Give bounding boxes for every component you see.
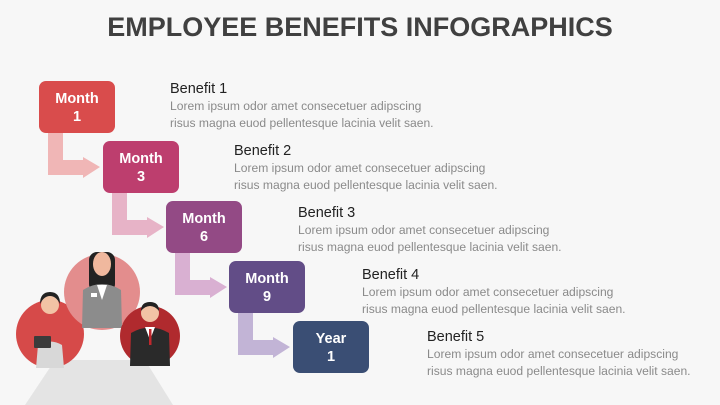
- text: benefit 5: risus magna euod pellentesque lacinia velit saen.: [427, 364, 691, 378]
- spotlight trapezoid: [25, 360, 173, 405]
- arrow 2: [112, 193, 164, 238]
- box: month 3: Month: [119, 151, 163, 167]
- box: month 1: [39, 81, 115, 133]
- box: month 9: Month: [245, 271, 289, 287]
- box: year 1: Year: [316, 331, 347, 347]
- title: EMPLOYEE BENEFITS INFOGRAPHICS: [107, 12, 613, 42]
- text: benefit 2: risus magna euod pellentesque lacinia velit saen.: [234, 178, 498, 192]
- arrow 4: [238, 313, 290, 358]
- icon: woman in grey suit: [64, 252, 140, 330]
- box: month 6: Month: [182, 211, 226, 227]
- text: benefit 1: Benefit 1: [170, 81, 227, 97]
- box: month 1: Month: [55, 91, 99, 107]
- text: benefit 3: [298, 205, 562, 254]
- icon: man in suit: [120, 302, 180, 366]
- box: month 6: [166, 201, 242, 253]
- box: month 6: 6: [200, 229, 208, 245]
- box: year 1: [293, 321, 369, 373]
- text: benefit 1: risus magna euod pellentesque lacinia velit saen.: [170, 116, 434, 130]
- text: benefit 4: Lorem ipsum odor amet consecetuer adipscing: [362, 285, 613, 299]
- text: benefit 5: Lorem ipsum odor amet consecetuer adipscing: [427, 347, 678, 361]
- box: month 9: 9: [263, 289, 271, 305]
- text: benefit 2: Lorem ipsum odor amet consecetuer adipscing: [234, 161, 485, 175]
- text: benefit 3: risus magna euod pellentesque lacinia velit saen.: [298, 240, 562, 254]
- text: benefit 3: Benefit 3: [298, 205, 355, 221]
- text: benefit 2: [234, 143, 498, 192]
- text: benefit 4: Benefit 4: [362, 267, 419, 283]
- text: benefit 5: Benefit 5: [427, 329, 484, 345]
- box: year 1: 1: [327, 349, 335, 365]
- box: month 3: 3: [137, 169, 145, 185]
- text: benefit 1: [170, 81, 434, 130]
- arrow 3: [175, 253, 227, 298]
- text: benefit 4: [362, 267, 626, 316]
- box: month 3: [103, 141, 179, 193]
- text: benefit 4: risus magna euod pellentesque lacinia velit saen.: [362, 302, 626, 316]
- icon: woman with tablet: [16, 292, 84, 368]
- text: benefit 1: Lorem ipsum odor amet consecetuer adipscing: [170, 99, 421, 113]
- box: month 9: [229, 261, 305, 313]
- text: benefit 3: Lorem ipsum odor amet consecetuer adipscing: [298, 223, 549, 237]
- text: benefit 5: [427, 329, 691, 378]
- box: month 1: 1: [73, 109, 81, 125]
- arrow 1: [48, 133, 100, 178]
- text: benefit 2: Benefit 2: [234, 143, 291, 159]
